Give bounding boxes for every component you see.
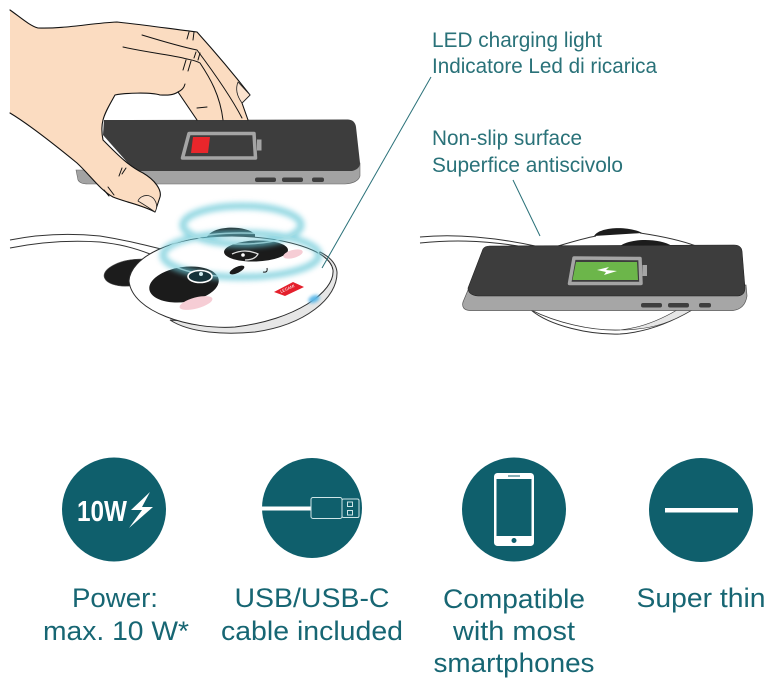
icon: 10W [62,458,166,562]
panda base below phone [531,310,692,334]
non-slip label [432,127,623,177]
phone 1 screen [103,120,360,171]
power label [43,583,190,646]
panda eye highlights [188,251,258,282]
icon: thin line [649,458,753,562]
battery low icon [182,134,262,158]
panda face [129,236,333,327]
cable left [10,234,165,254]
illustration: phone above panda charger with hand [10,10,431,333]
feature: thin [636,458,766,613]
phone 1 side [76,163,360,184]
feature: power [43,458,190,646]
LED label: Indicatore Led di ricarica [432,55,657,78]
cable label: cable included [221,616,403,646]
red logo tag: LEGAMI [279,283,295,294]
panda left ear [104,259,142,286]
battery full icon [570,258,647,284]
panda nose and mouth [228,264,267,276]
LED callout line [322,77,431,268]
phone 2 screen [468,245,745,296]
power label: max. 10 W* [43,616,190,646]
feature: cable [221,458,403,646]
cable label: USB/USB-C [234,583,390,613]
red logo tag [274,282,304,296]
hand [10,10,250,212]
thin label: Super thin [636,583,766,613]
cable right [420,233,696,247]
icon: 10W: 10W [77,496,128,528]
phone 1 ports [255,178,324,182]
cable label [221,583,403,646]
LED label: LED charging light [432,29,602,52]
icon: USB plug [262,458,362,558]
panda ears behind phone [594,228,672,246]
illustration: phone charging on panda [420,228,747,334]
compatible label: smartphones [434,648,594,678]
non-slip label: Superfice antiscivolo [432,154,623,177]
panda top ear [207,228,255,238]
non-slip label: Non-slip surface [432,127,582,150]
power label: Power: [72,583,158,613]
LED label [432,29,657,78]
panda right eye [224,239,288,263]
panda left eye [147,262,221,307]
feature: compatible [434,458,594,678]
compatible label: Compatible [443,584,585,614]
LED light [307,293,321,305]
icon: smartphone [462,458,566,562]
compatible label [434,584,594,678]
wireless charge rings [163,206,319,277]
panda cheeks [178,248,304,313]
compatible label: with most [452,616,576,646]
non-slip callout line [513,180,540,236]
phone 2 ports [641,303,711,308]
phone 2 side [463,285,747,310]
panda charger base [170,252,337,333]
